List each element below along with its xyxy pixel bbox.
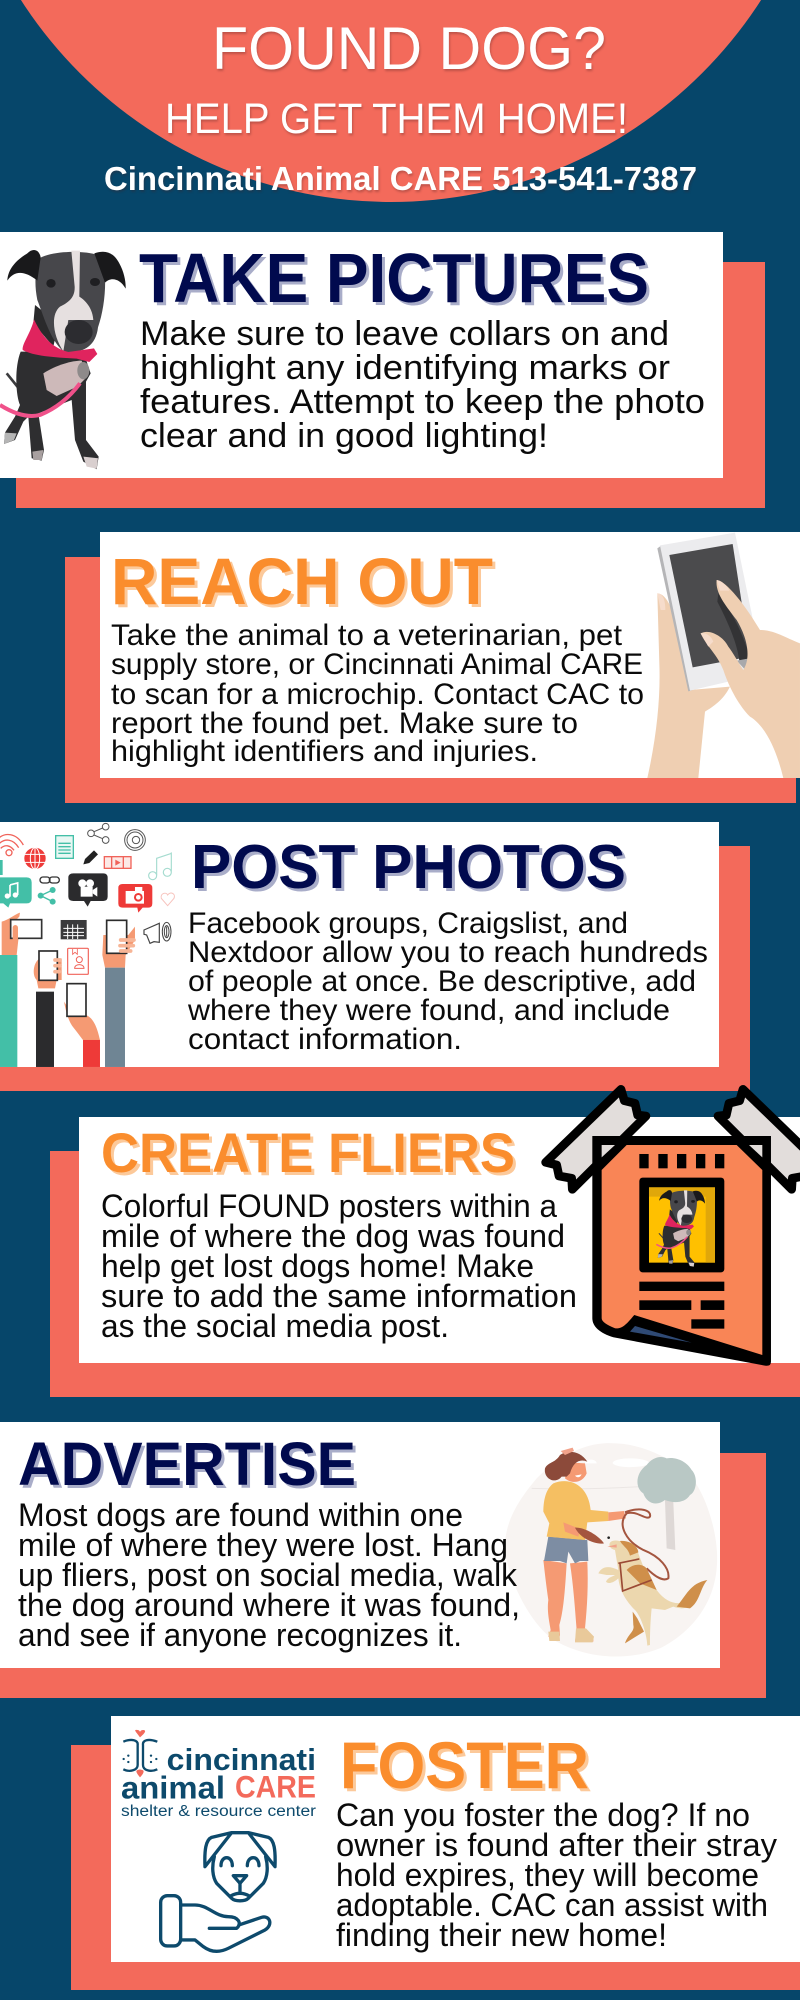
text: post photos [187, 907, 708, 1056]
panel: advertise [0, 1422, 766, 1698]
text: foster: owner is found after their stray [336, 1827, 777, 1863]
heading: reach out: REACH OUT [111, 544, 493, 618]
text: reach out: report the found pet. Make sure to [111, 707, 578, 740]
text: create fliers: sure to add the same information [101, 1278, 577, 1314]
text: reach out: supply store, or Cincinnati Animal CARE [111, 648, 643, 681]
logo: cincinnati animal care: shelter & resource center [121, 1803, 316, 1820]
text: post photos: where they were found, and include [187, 994, 670, 1027]
text: foster [336, 1797, 777, 1953]
text: take pictures: features. Attempt to keep the photo [140, 383, 705, 421]
text: take pictures: clear and in good lighting! [140, 417, 548, 455]
text: foster: Can you foster the dog? If no [336, 1797, 750, 1833]
text: post photos: contact information. [188, 1023, 462, 1056]
text: take pictures [140, 315, 705, 455]
text: create fliers: help get lost dogs home! Make [101, 1248, 534, 1284]
panel: reach out [65, 532, 800, 803]
text: create fliers: Colorful FOUND posters within a [101, 1188, 557, 1224]
text: post photos: of people at once. Be descriptive, add [188, 965, 696, 998]
title: FOUND DOG? [212, 15, 606, 82]
text: post photos: Facebook groups, Craigslist, and [188, 907, 628, 940]
text: advertise: up fliers, post on social media, walk [18, 1557, 518, 1593]
text: create fliers: as the social media post. [101, 1308, 449, 1344]
icon: taped flier [546, 1089, 800, 1366]
logo: cincinnati animal care: CARE [235, 1769, 316, 1804]
illustration: woman playing with dog [505, 1443, 717, 1657]
heading: advertise: ADVERTISE [18, 1430, 356, 1498]
header circle [0, 0, 800, 202]
text: reach out [111, 619, 644, 768]
logo: cincinnati animal care: cincinnati [167, 1743, 316, 1777]
text: take pictures: Make sure to leave collars on and [140, 315, 669, 353]
panel: post photos [0, 822, 750, 1091]
text: foster: hold expires, they will become [336, 1857, 759, 1893]
logo: cincinnati animal care: animal [121, 1770, 225, 1805]
heading: create fliers: CREATE FLIERS [101, 1121, 515, 1184]
panel: foster [71, 1716, 800, 1990]
panel: take pictures [0, 232, 765, 508]
contact line: Cincinnati Animal CARE 513-541-7387 [104, 160, 697, 197]
text: take pictures: highlight any identifying marks or [140, 349, 670, 387]
icon: hands holding phone [647, 533, 800, 778]
heading: take pictures: TAKE PICTURES [139, 239, 649, 317]
text: create fliers [101, 1188, 577, 1344]
text: post photos: Nextdoor allow you to reach hundreds [188, 936, 708, 969]
subtitle: HELP GET THEM HOME! [165, 95, 628, 143]
text: foster: finding their new home! [336, 1917, 667, 1953]
icon: dog photo [0, 250, 126, 469]
text: advertise: mile of where they were lost. Hang [18, 1527, 508, 1563]
text: foster: adoptable. CAC can assist with [336, 1887, 768, 1923]
heading: foster: FOSTER [340, 1728, 589, 1802]
text: reach out: Take the animal to a veterinarian, pet [111, 619, 623, 652]
text: advertise: and see if anyone recognizes it. [18, 1617, 462, 1653]
logo: cincinnati animal care [121, 1730, 316, 1951]
text: advertise [18, 1497, 520, 1653]
text: advertise: Most dogs are found within one [18, 1497, 463, 1533]
text: reach out: highlight identifiers and injuries. [111, 735, 538, 768]
heading: post photos: POST PHOTOS [191, 833, 626, 902]
text: advertise: the dog around where it was found, [18, 1587, 520, 1623]
text: reach out: to scan for a microchip. Contact CAC to [111, 678, 644, 711]
text: create fliers: mile of where the dog was found [101, 1218, 565, 1254]
icon: social media hands [0, 823, 174, 1067]
title [104, 15, 697, 197]
panel: create fliers [50, 1089, 800, 1397]
icon: dog in hand [161, 1833, 275, 1951]
